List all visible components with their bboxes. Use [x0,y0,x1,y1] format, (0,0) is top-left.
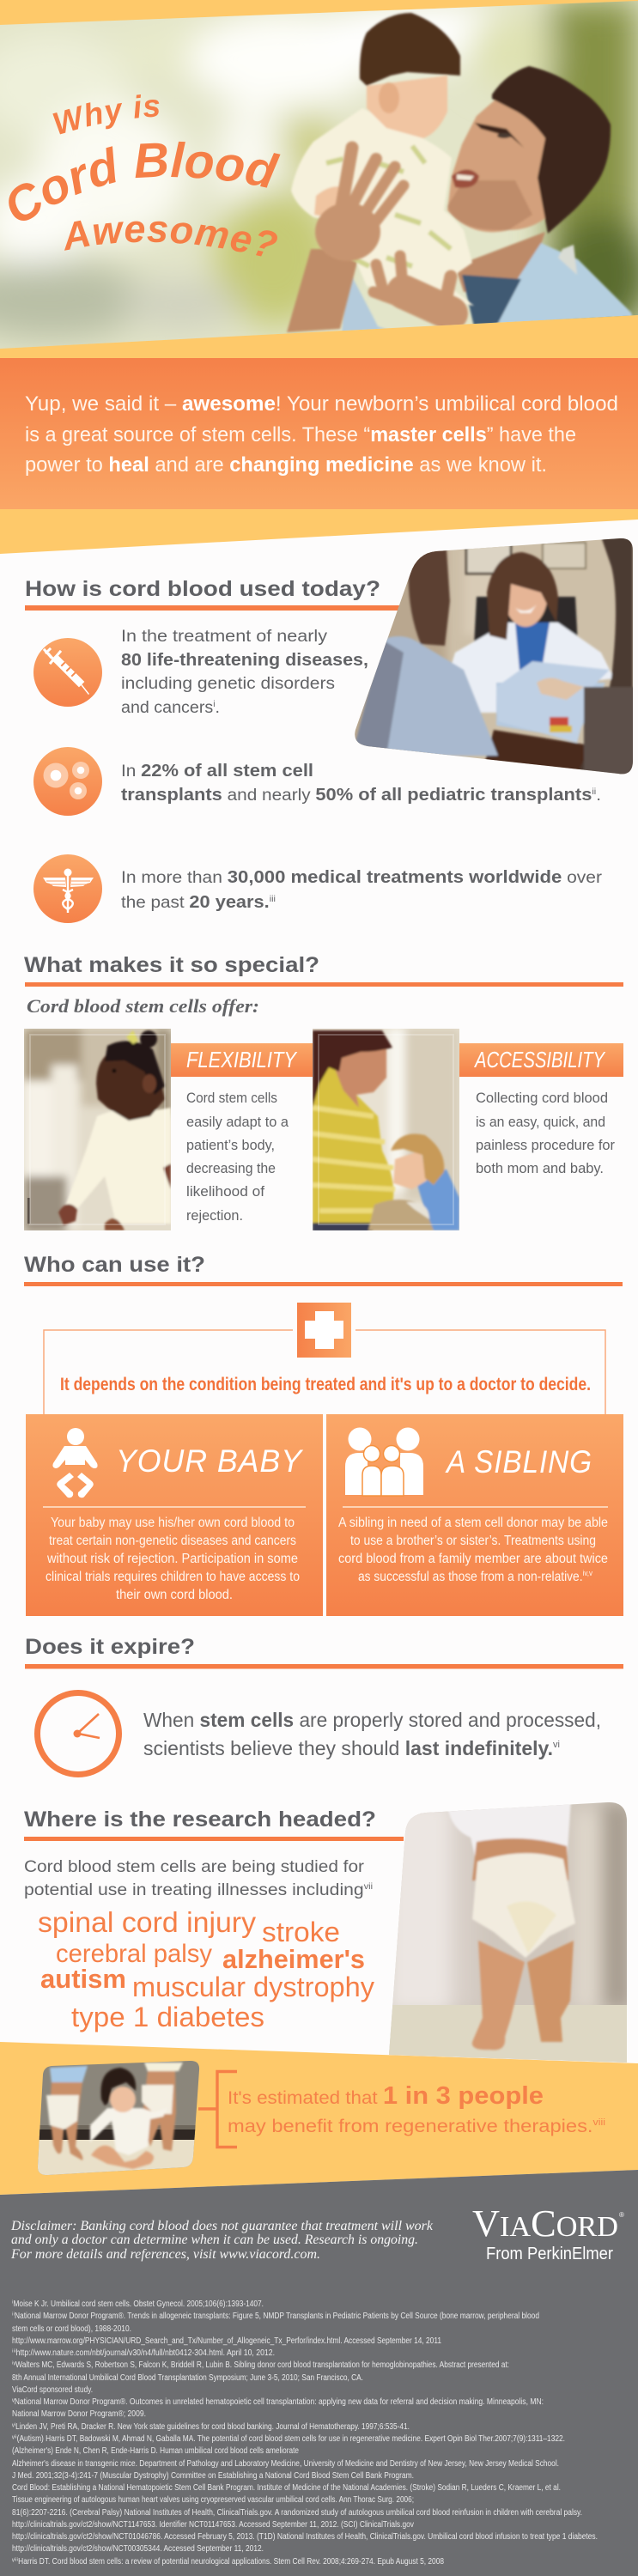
references: ᵛⁱⁱⁱHarris DT. Cord blood stem cells: a review of potential neurological applications. Stem Cell Rev. 2008;4:269-274. Epub August 5, 2008 [11,2557,444,2567]
heading: How is cord blood used today? [25,577,380,601]
body text: patient’s body, [186,1138,275,1153]
logo: ViaCord: ® [619,2211,624,2219]
references: ⁱⁱNational Marrow Donor Program®. Trends in allogeneic transplants: Figure 5, NMDP Transplants in Pediatric Patients by Cell Source (bone marrow, peripheral blood [12,2312,539,2321]
intro text [24,1857,373,1899]
text: vi [553,1740,560,1750]
logo: ViaCord: From PerkinElmer [486,2245,613,2263]
icon: baby [52,1428,98,1498]
references: ⁱMoise K Jr. Umbilical cord stem cells. Obstet Gynecol. 2005;106(6):1393-1407. [12,2300,264,2309]
disclaimer [10,2219,434,2262]
logo: ViaCord [472,2202,624,2263]
callout text [228,2082,605,2136]
references: 8th Annual International Umbilical Cord Blood Transplantation Symposium; June 3-5, 2010; San Francisco, CA. [12,2373,363,2383]
body text: is an easy, quick, and [476,1115,605,1130]
stat: 30,000 treatments [33,854,603,923]
text: In the treatment of nearly [121,628,328,646]
hero title: Cord Blood [9,141,280,221]
text: . [596,787,601,805]
text: ii [592,787,596,797]
references: ViaCord sponsored study. [12,2385,93,2395]
yellow statistic band [0,2042,638,2195]
icon: medical cross [297,1303,351,1358]
text [143,1709,601,1759]
body text: Collecting cord blood [476,1091,608,1106]
hero title: Why is [52,94,160,134]
word cloud of illnesses: spinal cord injury [38,1906,257,1938]
references: (Alzheimer's) Ende N, Chen R, Ende-Harris D. Human umbilical cord blood cells ameliorate [12,2446,299,2456]
text: scientists believe they should last indefinitely. [143,1737,553,1759]
body text: to use a brother’s or sister’s. Treatments using [350,1534,596,1548]
intro panel [0,358,638,509]
text [121,762,601,805]
label band [459,1043,623,1077]
body text: painless procedure for [476,1138,615,1153]
intro text: Yup, we said it – awesome! Your newborn’s umbilical cord blood [25,392,618,416]
references: ⁱⁱⁱhttp://www.nature.com/nbt/journal/v30/n4/full/nbt0412-304.html. April 10, 2012. [12,2348,275,2358]
father [342,66,638,335]
text: In more than 30,000 medical treatments worldwide over [121,868,603,887]
hero title [9,94,280,256]
body text: treat certain non-genetic diseases and cancers [49,1534,296,1548]
body text: Cord stem cells [186,1091,277,1106]
callout frame [44,1330,605,1414]
word cloud of illnesses: autism [40,1964,126,1994]
word cloud of illnesses: muscular dystrophy [132,1971,374,2002]
hero banner [0,0,638,554]
callout bracket [198,2071,237,2147]
text: When stem cells are properly stored and processed, [143,1709,601,1731]
icon: clock [38,1693,118,1774]
heading: What makes it so special? [24,953,319,977]
text: the past 20 years. [121,893,263,912]
intro text [25,392,618,477]
word cloud of illnesses: type 1 diabetes [71,2002,264,2032]
body text [46,1516,300,1602]
word cloud of illnesses: alzheimer's [222,1944,365,1974]
subheading: Cord blood stem cells offer: [27,995,259,1017]
section: how is cord blood used today [25,532,638,923]
heading: Does it expire? [25,1635,195,1659]
references: ⁱᵛWalters MC, Edwards S, Robertson S, Falcon K, Briddell R, Lubin B. Sibling donor cord blood transplantation for hemoglobinopathies. Abstract presented at: [12,2360,509,2370]
word cloud of illnesses: stroke [262,1917,340,1947]
stat: transplants [33,747,601,816]
hero photo: father lifting baby [0,0,638,352]
references: ᵛⁱLinden JV, Preti RA, Dracker R. New York state guidelines for cord blood banking. Journal of Hematotherapy. 1997;6:535-41. [11,2422,410,2432]
panel: flexibility: FLEXIBILITY [186,1047,297,1072]
callout text: may benefit from regenerative therapies. [228,2117,551,2136]
body text: rejection. [186,1208,243,1224]
section: where is the research headed [0,1799,638,2195]
label: A SIBLING [445,1444,592,1479]
text: and cancers [121,699,210,717]
section: who can use it [24,1253,623,1616]
text [121,868,603,912]
references: National Marrow Donor Program®; 2009. [12,2409,146,2419]
references: http://clinicaltrials.gov/ct2/show/NCT1147653. Identifier NCT01147653. Accessed September 11, 2012. (SCI) ClinicalTrials.gov [12,2520,414,2530]
body text: easily adapt to a [186,1115,289,1130]
references: stem cells or cord blood), 1988-2010. [12,2324,131,2334]
photo: pregnant mother and toddler [313,1029,459,1231]
body text: clinical trials requires children to have access to [46,1570,300,1584]
text: iii [270,895,276,904]
body text [476,1091,615,1176]
text: 80 life-threatening diseases, [121,651,368,670]
logo: ViaCord: VIACORD [472,2202,618,2245]
footer panel [0,2170,638,2576]
body text: decreasing the [186,1161,276,1176]
icon: family [345,1427,423,1496]
body text: without risk of rejection. Participation in some [46,1552,298,1566]
intro text: is a great source of stem cells. These “master cells” have the [25,423,576,447]
photo: three babies [34,2059,203,2178]
references: ᵛNational Marrow Donor Program®. Outcomes in unrelated hematopoietic cell transplantation: applying new data for referral and decision making. Minneapolis, MN: [11,2397,544,2407]
disclaimer: Disclaimer: Banking cord blood does not guarantee that treatment will work [10,2219,434,2233]
panel: accessibility: ACCESSIBILITY [473,1047,605,1072]
text: . [216,699,220,717]
disclaimer: For more details and references, visit www.viacord.com. [10,2247,320,2262]
icon: stem cells [33,747,102,816]
body text: their own cord blood. [116,1588,233,1602]
intro text: Cord blood stem cells are being studied for [24,1857,365,1876]
text: transplants and nearly 50% of all pediatric transplants [121,786,568,805]
body text [338,1516,608,1584]
body text: iv,v [583,1569,592,1577]
references: Tissue engineering of autologous human heart valves using cryopreserved vascular umbilical cord cells. Ann Thorac Surg. 2006; [12,2495,414,2505]
references [11,2300,598,2567]
word cloud of illnesses: cerebral palsy [56,1940,212,1968]
label band [171,1043,313,1077]
father's forearm [287,249,361,332]
panel: a sibling [326,1414,623,1616]
references: J Med. 2001;32(3-4):241-7 (Muscular Dystrophy) Committee on Establishing a National Cord Blood Stem Cell Bank Program. [12,2471,414,2481]
hero title: Awesome? [64,220,277,256]
photo: baby standing in diaper [386,1799,631,2065]
references: http://www.marrow.org/PHYSICIAN/URD_Search_and_Tx/Number_of_Allogeneic_Tx_Perfor/index.html. Accessed September 14, 2011 [12,2336,441,2346]
intro text: vii [364,1882,373,1892]
body text: A sibling in need of a stem cell donor may be able [338,1516,608,1530]
body text: Your baby may use his/her own cord blood to [51,1516,295,1530]
callout text: It's estimated that 1 in 3 people [228,2082,544,2110]
baby [291,13,474,306]
hero yellow band [0,0,638,554]
father's hands [315,148,451,313]
label: YOUR BABY [116,1443,303,1479]
section: what makes it so special [24,953,623,1232]
text [121,628,368,717]
text: including genetic disorders [121,675,335,693]
heading: Who can use it? [24,1253,205,1277]
body text: as successful as those from a non-relative. [358,1570,611,1584]
body text: likelihood of [186,1184,264,1200]
body text: cord blood from a family member are about twice [338,1552,608,1566]
word cloud of illnesses [38,1906,374,2032]
body text: both mom and baby. [476,1161,604,1176]
panel: accessibility [459,1043,623,1176]
references: http://clinicaltrials.gov/ct2/show/NCT00305344. Accessed September 11, 2012. [12,2544,264,2554]
intro text: power to heal and are changing medicine as we know it. [25,453,547,477]
icon: syringe [33,638,102,707]
heading: Where is the research headed? [24,1807,376,1832]
photo: toddler girl [24,1029,172,1232]
callout text: viii [593,2117,605,2128]
panel: flexibility [171,1043,313,1224]
text: i [213,700,216,709]
disclaimer: and only a doctor can determine when it can be used. Research is ongoing. [11,2233,418,2247]
intro text: potential use in treating illnesses including [24,1880,337,1899]
panel: your baby [26,1414,323,1616]
stat: 80 diseases [33,628,368,717]
body text [186,1091,289,1224]
section: does it expire [25,1635,623,1774]
photo: doctor consultation [355,538,633,775]
text: In 22% of all stem cell [121,762,313,781]
icon: caduceus [33,854,102,923]
